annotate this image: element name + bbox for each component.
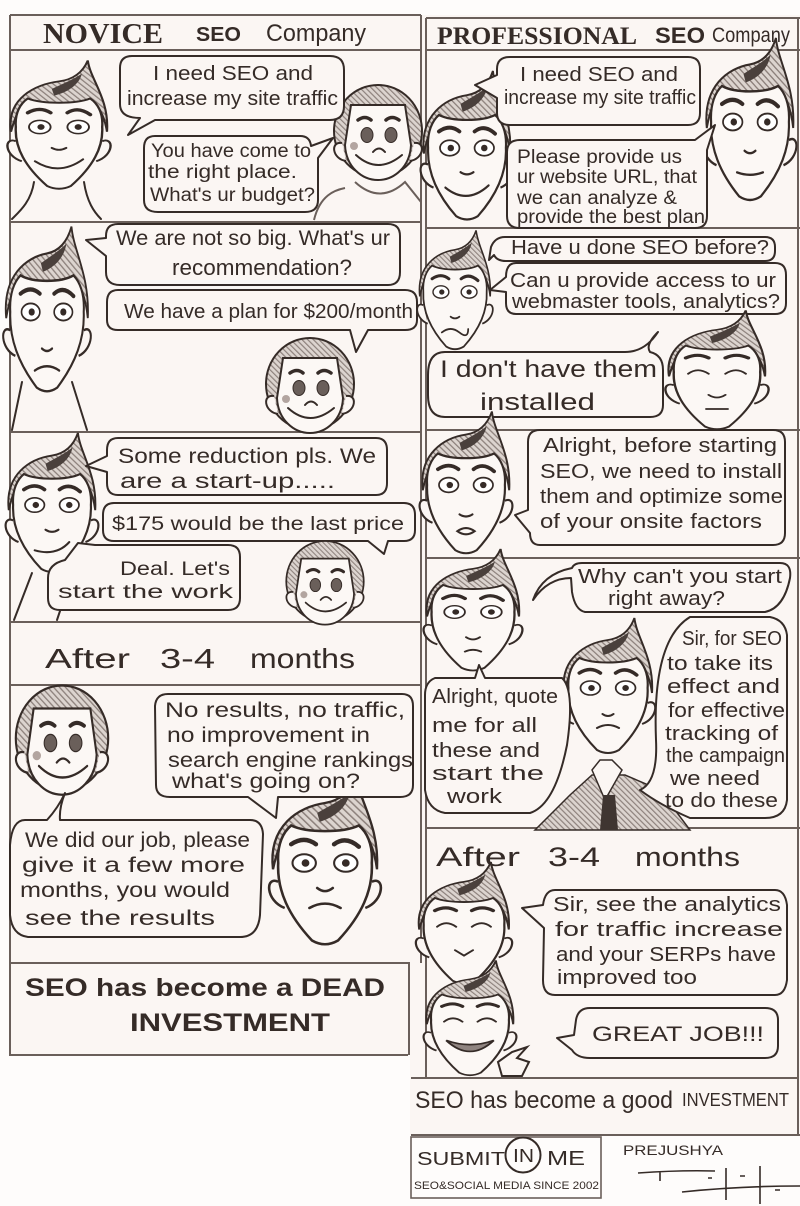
heading: novice SEO company: NOVICE (43, 18, 163, 50)
speech bubble: sir for SEO: to take its (667, 653, 773, 675)
speech bubble: not installed: installed (480, 389, 595, 416)
speech bubble: right place, budget: What's ur budget? (150, 185, 315, 206)
caption: after 3-4 months, left (45, 643, 355, 674)
heading: professional SEO company (437, 23, 790, 50)
speech bubble: quote me: these and (432, 740, 540, 762)
panel: novice SEO company column (10, 15, 421, 1055)
speech bubble: not so big (86, 224, 400, 285)
artist signature (638, 1166, 800, 1204)
speech bubble: no results: what's going on? (171, 770, 360, 793)
speech bubble: I need SEO (120, 56, 344, 135)
speech bubble: see the analytics: improved too (557, 967, 697, 989)
heading: novice SEO company: Company (266, 20, 366, 47)
speech bubble: plan for 200 per month (107, 290, 417, 352)
speech bubble: deal: start the work (58, 582, 234, 603)
speech bubble: right place, budget (144, 136, 333, 212)
conclusion: dead investment (25, 974, 385, 1037)
heading: novice SEO company (43, 18, 366, 50)
speech bubble: quote me (425, 665, 570, 813)
speech bubble: please provide URL: ur website URL, that (517, 167, 698, 188)
speech bubble: I need SEO, professional: increase my site traffic (504, 87, 696, 109)
caption: after 3-4 months, left: months (250, 643, 355, 674)
speech bubble: why not start (533, 563, 790, 612)
heading: professional SEO company: SEO (655, 23, 705, 48)
speech bubble: I need SEO, professional (475, 57, 700, 125)
speech bubble: provide access: Can u provide access to ur (510, 270, 776, 292)
speech bubble: see the analytics: Sir, see the analytics (553, 894, 781, 916)
speech bubble: provide access (490, 263, 786, 314)
logo: Submit In Me (411, 1137, 601, 1198)
caption: after 3-4 months, right: After (436, 842, 520, 872)
conclusion: good investment: INVESTMENT (682, 1090, 789, 1110)
speech bubble: no results (155, 694, 413, 818)
speech bubble: sir for SEO: the campaign (666, 745, 785, 767)
speech bubble: quote me: Alright, quote (432, 686, 558, 708)
character: worried client, panel 2 (3, 227, 91, 430)
speech bubble: no results: search engine rankings (168, 749, 413, 772)
speech bubble: right place, budget: the right place. (148, 162, 297, 183)
speech bubble: see the analytics: and your SERPs have (556, 944, 776, 966)
speech bubble: please provide URL: we can analyze & (516, 188, 677, 209)
speech bubble: sir for SEO: Sir, for SEO (682, 628, 782, 650)
speech bubble: not installed: I don't have them (440, 356, 657, 383)
speech bubble: quote me: work (446, 786, 503, 808)
heading: novice SEO company: SEO (196, 24, 241, 46)
speech bubble: great job: GREAT JOB!!! (592, 1023, 764, 1046)
caption: after 3-4 months, right: 3-4 (548, 842, 600, 872)
speech bubble: why not start: Why can't you start (578, 566, 783, 588)
artist name: Prejushya: PREJUSHYA (623, 1142, 724, 1158)
speech bubble: deal: Deal. Let's (120, 559, 230, 580)
speech bubble: done SEO before: Have u done SEO before? (511, 237, 769, 259)
logo: Submit In Me: IN (513, 1146, 534, 1166)
character: consultant, panel 3 (420, 412, 512, 553)
character: apologetic novice agent (269, 776, 381, 944)
character: worried client, panel 2 (417, 230, 493, 349)
speech bubble: please provide URL: Please provide us (517, 147, 682, 168)
speech bubble: sir for SEO: to do these (665, 790, 778, 812)
speech bubble: some reduction: are a start-up..... (120, 470, 335, 493)
logo: Submit In Me: ME (547, 1148, 585, 1170)
speech bubble: last price: $175 would be the last price (112, 514, 404, 535)
speech bubble: sir for SEO: tracking of (665, 723, 779, 745)
speech bubble: I need SEO: I need SEO and (153, 63, 313, 85)
speech bubble: not so big: recommendation? (172, 255, 352, 280)
character: confused client, panel 4 (424, 549, 522, 670)
speech bubble: quote me: me for all (432, 715, 537, 737)
speech bubble: right place, budget: You have come to (151, 141, 311, 162)
character: delighted client with thumbs up (424, 960, 529, 1076)
speech bubble: before starting SEO: SEO, we need to install (540, 461, 782, 483)
logo: Submit In Me: SUBMIT (417, 1149, 505, 1169)
speech bubble: sir for SEO (640, 617, 787, 818)
speech bubble: before starting SEO: them and optimize some (540, 486, 783, 508)
character: sly client, panel 3 (6, 433, 98, 620)
heading: professional SEO company: PROFESSIONAL (437, 23, 637, 50)
speech bubble: we did our job: give it a few more (22, 854, 245, 877)
speech bubble: we did our job (10, 793, 263, 937)
character: winking agent (286, 541, 364, 625)
character: professional client, panel 1 (421, 71, 513, 220)
panel: professional SEO company column (411, 18, 800, 1135)
speech bubble: please provide URL (507, 125, 715, 228)
speech bubble: before starting SEO (515, 430, 785, 545)
speech bubble: please provide URL: provide the best plan (517, 207, 705, 228)
speech bubble: we did our job: see the results (25, 907, 215, 930)
speech bubble: quote me: start the (432, 763, 544, 785)
speech bubble: see the analytics: for traffic increase (555, 919, 783, 941)
speech bubble: some reduction (86, 438, 387, 495)
caption: after 3-4 months, right (436, 842, 740, 872)
speech bubble: sir for SEO: we need (669, 768, 760, 790)
speech bubble: last price (103, 503, 415, 554)
conclusion: dead investment: INVESTMENT (130, 1009, 330, 1037)
caption: after 3-4 months, left: After (45, 643, 130, 674)
speech bubble: deal (48, 543, 240, 610)
character: client asking about results (16, 686, 108, 795)
caption: after 3-4 months, left: 3-4 (160, 643, 215, 674)
speech bubble: plan for 200 per month: We have a plan for $200/month (124, 301, 413, 323)
character: novice agent, panel 2 (266, 338, 354, 433)
speech bubble: I need SEO, professional: I need SEO and (520, 64, 678, 86)
speech bubble: no results: no improvement in (167, 724, 370, 747)
speech bubble: provide access: webmaster tools, analytics? (511, 291, 780, 313)
speech bubble: I need SEO: increase my site traffic (127, 88, 338, 110)
character: happy consultant (416, 862, 512, 984)
speech bubble: we did our job: months, you would (20, 879, 230, 902)
speech bubble: not installed (428, 332, 663, 417)
speech bubble: see the analytics (522, 890, 787, 995)
speech bubble: we did our job: We did our job, please (25, 829, 250, 852)
character: novice agent with headphones (314, 85, 422, 220)
logo: Submit In Me: SEO&SOCIAL MEDIA SINCE 2002 (414, 1180, 599, 1192)
speech bubble: before starting SEO: of your onsite factors (540, 511, 762, 533)
speech bubble: sir for SEO: for effective (668, 700, 785, 722)
speech bubble: why not start: right away? (608, 588, 725, 610)
speech bubble: no results: No results, no traffic, (165, 699, 405, 722)
conclusion: dead investment: SEO has become a DEAD (25, 974, 385, 1002)
speech bubble: some reduction: Some reduction pls. We (118, 445, 376, 468)
character: consultant in suit and tie (535, 618, 690, 830)
heading: professional SEO company: Company (712, 24, 790, 47)
speech bubble: great job (557, 1008, 778, 1058)
conclusion: good investment: SEO has become a good (415, 1087, 673, 1114)
character: consultant with closed eyes (665, 310, 769, 429)
caption: after 3-4 months, right: months (635, 842, 740, 872)
speech bubble: not so big: We are not so big. What's ur (116, 227, 390, 250)
speech bubble: before starting SEO: Alright, before starting (543, 435, 777, 457)
character: professional consultant, panel 1 (704, 38, 796, 200)
speech bubble: sir for SEO: effect and (667, 676, 780, 698)
character: novice client, panel 1 (7, 60, 111, 219)
